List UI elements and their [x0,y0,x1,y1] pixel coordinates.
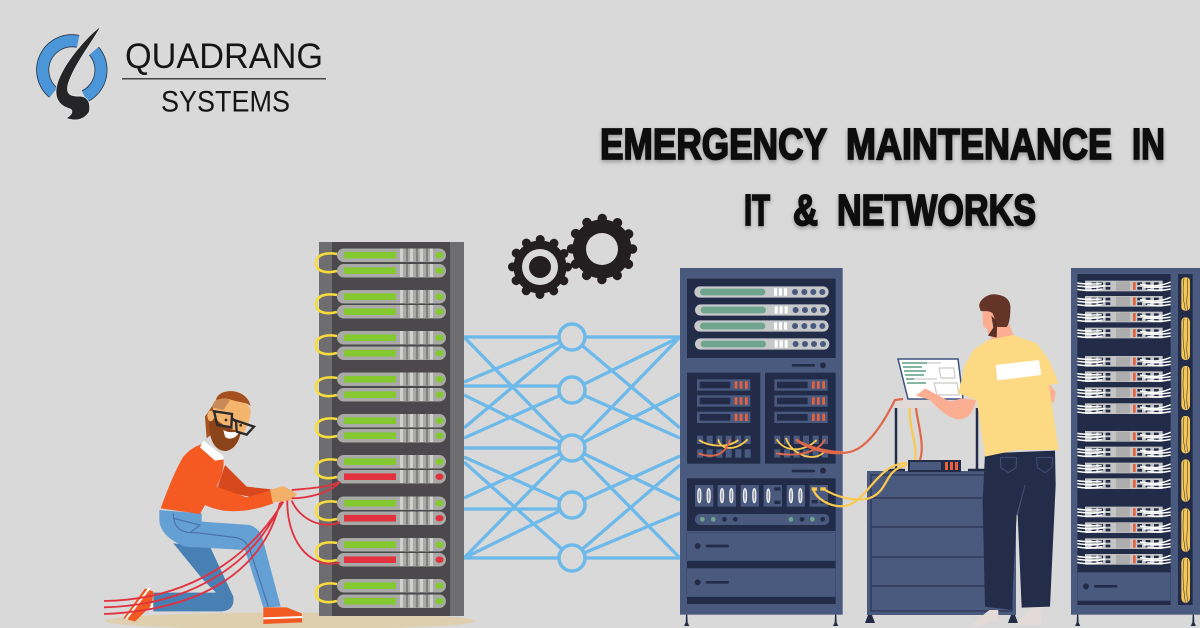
icon: large gear [572,218,632,280]
server panel [1077,274,1171,605]
cabinet legs [865,615,1018,623]
left switch panel [687,373,760,464]
title line 2: & [793,186,818,235]
rack units [337,248,446,608]
laptop table and router [888,359,985,472]
title line 2: IT [744,186,770,235]
back leg [153,543,234,611]
back pockets [1000,457,1053,515]
patch panel [687,478,836,531]
desk cabinet [865,471,1018,623]
ground shadow [105,612,475,628]
laptop [898,359,963,399]
yellow patch loops [316,253,337,602]
shirt back label [996,360,1041,380]
logo wordmark: SYSTEMS: SYSTEMS [161,86,290,118]
middle server rack [680,268,843,626]
top server panel [687,279,836,358]
icon: logo mark [43,26,101,120]
technician at laptop [916,294,1059,628]
rack frame [319,242,464,616]
back shoe [123,588,153,622]
router [908,460,961,472]
technician pulling red cables [104,391,340,624]
slot indicator [792,362,826,368]
lower drawer [1077,572,1171,601]
shoes [973,608,1042,628]
title line 1 [600,120,1165,169]
red cables [104,482,340,614]
front leg [159,510,281,607]
logo divider [122,78,326,80]
rack frame [680,268,843,615]
rack feet [1075,615,1196,626]
title line 1: IN [1132,120,1165,169]
collar [200,441,223,461]
far arm [1048,383,1056,402]
network nodes [559,324,585,571]
logo wordmark: QUADRANG: QUADRANG [125,37,323,76]
slot indicator [792,468,826,474]
far arm [217,465,273,502]
right switch panel [765,373,843,464]
table legs [896,408,977,470]
lower drawers [687,533,836,604]
icon: gears [512,218,632,294]
shirt [958,335,1059,457]
network lines [464,337,680,558]
icon: small gear [512,240,568,294]
title [600,120,1165,235]
title line 2 [744,186,1036,235]
head [979,294,1011,338]
front shoe [263,607,302,624]
title line 1: MAINTENANCE [846,120,1112,169]
logo: Quadrang Systems [43,26,326,120]
connecting cables [796,399,922,506]
sweater [161,444,273,514]
network connection diagram [464,324,680,571]
left server rack [316,242,464,616]
pants [983,451,1056,610]
table feet [888,469,985,471]
neck [990,324,1014,341]
title line 1: EMERGENCY [600,120,827,169]
forearm and hand [916,388,976,419]
hand [270,486,297,502]
right server rack [1071,268,1200,626]
title line 2: NETWORKS [837,186,1036,235]
head [205,391,254,451]
rack feet [684,615,838,626]
cable channel [1178,274,1193,605]
cabinet body [867,471,1016,615]
rack frame [1071,268,1200,615]
table top [895,400,963,408]
